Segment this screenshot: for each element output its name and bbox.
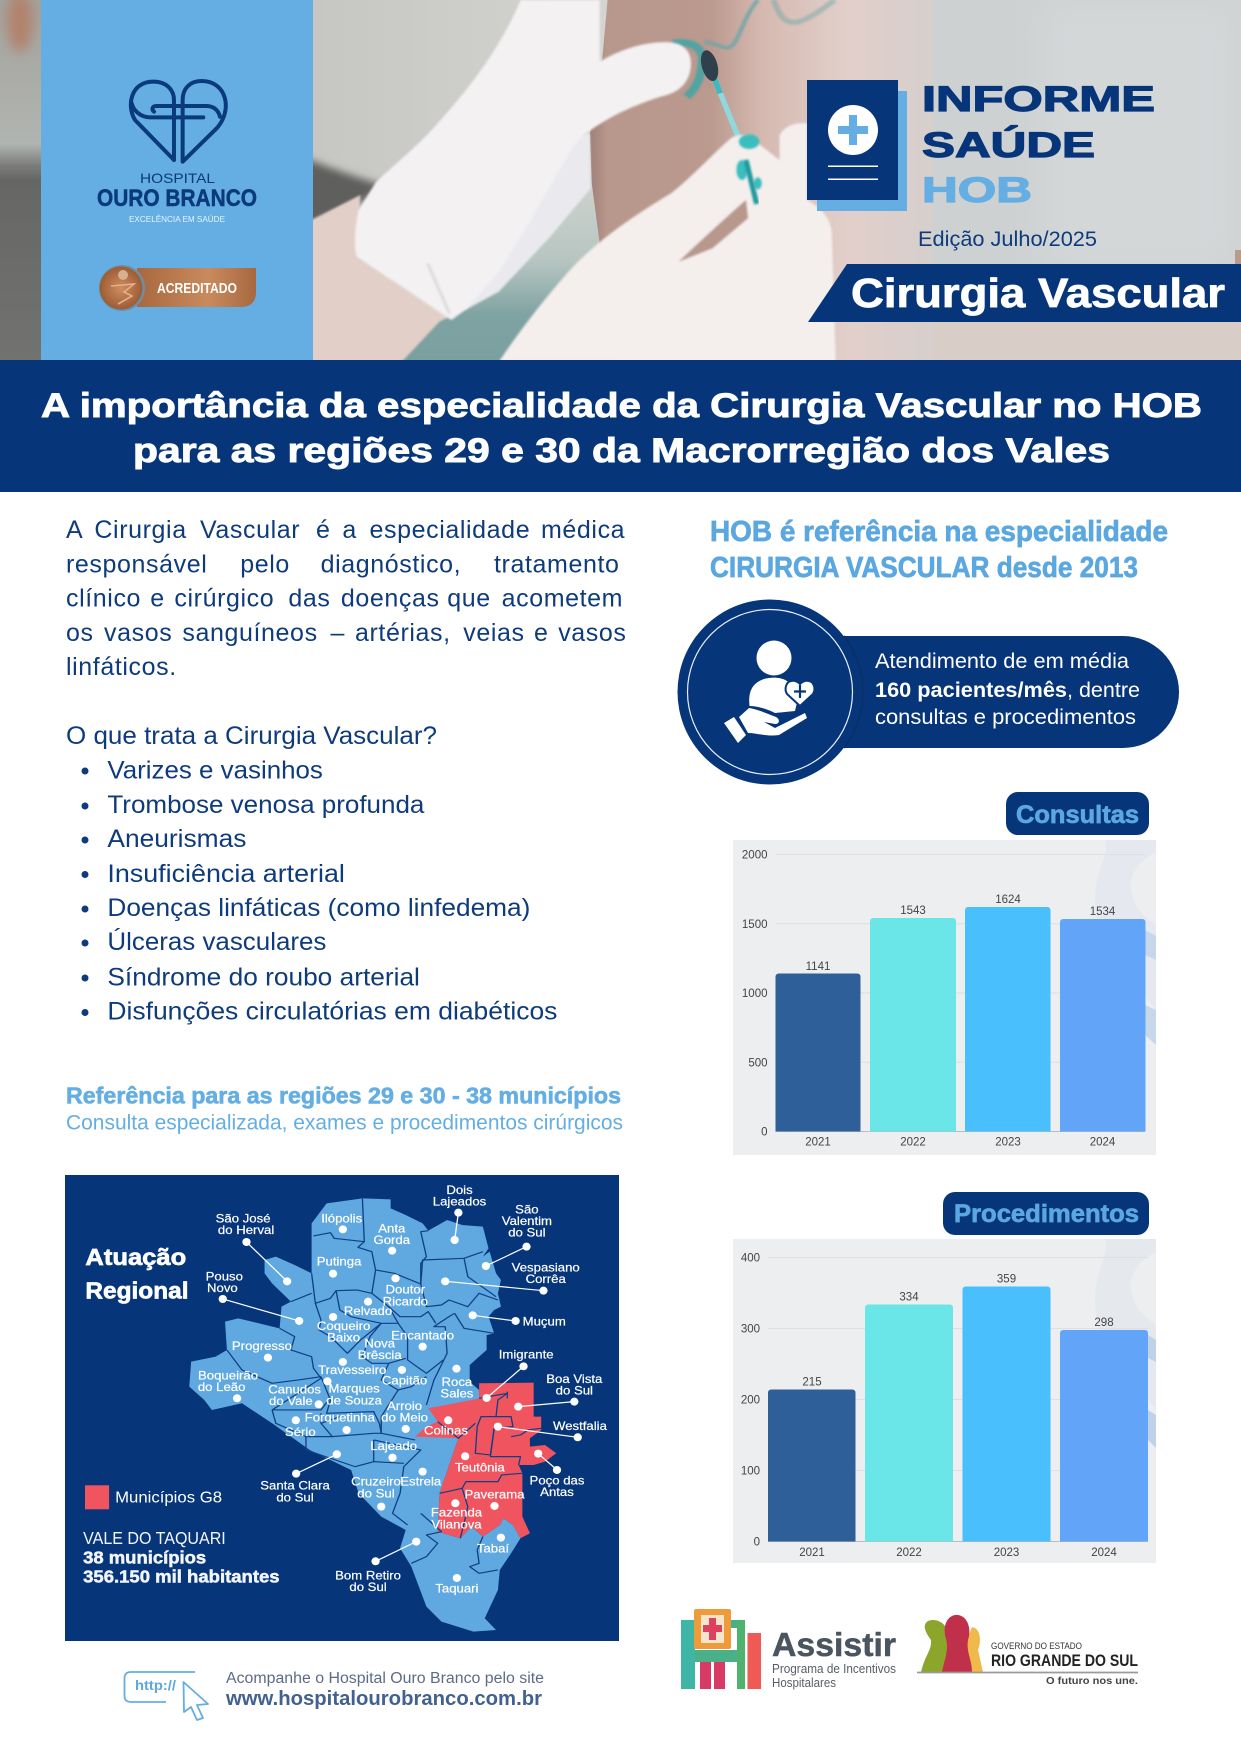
website text: www.hospitalourobranco.com.br [225, 1688, 542, 1710]
list of conditions: Aneurismas [107, 825, 246, 853]
map: municipality labels: Ilópolis [321, 1212, 362, 1225]
map: municipality labels: Bom Retiro [335, 1569, 401, 1582]
map: connector lines [223, 1213, 578, 1561]
map: municipality labels: Lajeados [433, 1195, 486, 1208]
callout: patients per month [678, 600, 1179, 784]
axis and value labels: 2023 [995, 1136, 1021, 1148]
text block: definition: clínico [66, 584, 141, 612]
title: informe saude hob: HOB [922, 171, 1032, 210]
map: municipality labels: Cruzeiro [351, 1475, 401, 1488]
map: municipality labels: Travesseiro [318, 1364, 386, 1377]
list of conditions: Doenças linfáticas (como linfedema) [107, 894, 530, 922]
bar chart: procedimentos [733, 1239, 1156, 1563]
title: informe saude hob: INFORME [922, 80, 1155, 119]
callout text: consultas e procedimentos [875, 706, 1136, 729]
map: municipality labels: Sério [285, 1426, 316, 1439]
map: municipality labels: Pouso [206, 1270, 243, 1283]
skin between glove fingers [679, 200, 748, 262]
badge: acreditado: ACREDITADO [157, 280, 237, 297]
map: location dots [219, 1209, 582, 1582]
logo: assistir [681, 1609, 896, 1690]
map: municipality labels: Corrêa [526, 1273, 566, 1286]
list of conditions: Trombose venosa profunda [107, 791, 424, 819]
axis and value labels: 1500 [742, 919, 768, 931]
title: informe saude hob [922, 80, 1155, 210]
map statistics: VALE DO TAQUARI [83, 1528, 226, 1548]
text block: definition: linfáticos. [66, 653, 177, 681]
text block: reference: Referência para as regiões 29 e 30 - 38 municípios [66, 1082, 621, 1108]
pill heading: consultas: Consultas [1016, 801, 1139, 829]
heading: reference since 2013 [710, 516, 1168, 584]
bars [768, 1286, 1148, 1542]
heading: reference since 2013: CIRURGIA VASCULAR desde 2013 [710, 552, 1138, 584]
icon: informe document [807, 80, 907, 211]
text block: definition: que [447, 584, 491, 612]
axis and value labels: 359 [997, 1274, 1016, 1286]
panel: hospital logo column [41, 0, 313, 360]
legend: Municípios G8 [115, 1489, 222, 1506]
axis and value labels: 334 [899, 1292, 919, 1304]
logo: assistir: Assistir [772, 1626, 896, 1663]
map: municipality labels: Arroio [387, 1400, 422, 1413]
axis and value labels: 2023 [994, 1547, 1019, 1559]
hospital name: OURO BRANCO [97, 185, 257, 212]
axis and value labels: 0 [761, 1126, 768, 1138]
forearm [305, 195, 449, 362]
map: municipality labels: Muçum [523, 1315, 566, 1328]
map: municipality labels: Lajeado [370, 1440, 417, 1453]
text block: definition: tratamento [494, 550, 620, 578]
logo: governo do estado rio grande do sul: RIO GRANDE DO SUL [991, 1651, 1138, 1670]
text block: definition: vasos [558, 619, 627, 647]
axis and value labels: 2000 [742, 850, 768, 862]
map statistics: 356.150 mil habitantes [83, 1567, 280, 1586]
axis and value labels: 200 [741, 1394, 760, 1406]
text block: definition: artérias, [355, 619, 451, 647]
text block: definition: Vascular [200, 516, 300, 544]
map: municipality labels: Westfalia [553, 1420, 607, 1433]
axis and value labels: 1543 [900, 905, 926, 917]
main heading: para as regiões 29 e 30 da Macrorregião dos Vales [133, 432, 1110, 470]
map: municipality labels: do Meio [381, 1411, 428, 1424]
axis and value labels: 100 [741, 1466, 760, 1478]
callout text: Atendimento de em média [875, 650, 1129, 673]
axis and value labels: 2022 [900, 1136, 926, 1148]
main heading: A importância da especialidade da Cirurgia Vascular no HOB [41, 387, 1202, 425]
logo: governo do estado rio grande do sul: O futuro nos une. [1046, 1675, 1138, 1687]
text block: definition: é [316, 516, 331, 544]
map: municipality labels: Paverama [465, 1488, 525, 1501]
teal mark around fingertip [673, 43, 702, 97]
axis and value labels: 300 [741, 1324, 760, 1336]
text block: definition: A [66, 516, 83, 544]
text block: definition: e [150, 584, 165, 612]
map: municipalities in light blue [189, 1198, 520, 1632]
main heading [41, 387, 1202, 470]
map: municipality labels: Vilanova [431, 1518, 482, 1531]
map: municipality labels: Dois [446, 1184, 473, 1197]
map: municipality labels: Coqueiro [317, 1320, 370, 1333]
map: municipality labels: Marques [329, 1382, 380, 1395]
axis and value labels: 500 [748, 1058, 768, 1070]
map: municipality labels: do Sul [276, 1491, 314, 1504]
map: municipality labels: Progresso [232, 1340, 292, 1353]
map: municipality labels: Ricardo [383, 1295, 428, 1308]
text block: definition: sanguíneos [182, 619, 318, 647]
text block: definition: médica [541, 516, 625, 544]
map: municipality labels: Canudos [268, 1383, 321, 1396]
map: municipality labels: do Herval [218, 1224, 274, 1237]
map heading: Regional [85, 1278, 189, 1304]
first glove [355, 0, 691, 320]
icon: hand holding person with heart [724, 640, 814, 743]
map: municipality labels: Novo [207, 1282, 238, 1295]
text block: reference [66, 1082, 623, 1134]
back of first glove [464, 132, 592, 311]
axis and value labels: 1624 [995, 894, 1021, 906]
icon: http cursor [124, 1672, 208, 1720]
text block: reference: Consulta especializada, exames e procedimentos cirúrgicos [66, 1112, 623, 1134]
map: municipality labels: São [515, 1203, 539, 1216]
heading: reference since 2013: HOB é referência na especialidade [710, 516, 1168, 548]
map: municipality labels: Sales [440, 1387, 473, 1400]
vein marking [704, 0, 758, 48]
axis and value labels [741, 1252, 1117, 1559]
map: municipality labels: Doutor [386, 1283, 425, 1296]
map: municipality labels [198, 1184, 607, 1595]
map statistics: 38 municípios [83, 1547, 206, 1567]
map: municipality labels: Tabaí [477, 1542, 510, 1555]
axis and value labels: 400 [741, 1252, 760, 1264]
axis and value labels: 0 [754, 1536, 760, 1548]
ribbon: cirurgia vascular [808, 264, 1241, 322]
hospital name: HOSPITAL [140, 170, 215, 186]
map: municipality labels: Capitão [382, 1374, 427, 1387]
list of conditions: Síndrome do roubo arterial [107, 964, 420, 992]
map: municipality labels: Boqueirão [198, 1369, 258, 1382]
map: municipality labels: Brêscia [358, 1349, 402, 1362]
text block: definition: responsável [66, 550, 207, 578]
text block: definition: especialidade [370, 516, 530, 544]
axis and value labels: 215 [802, 1376, 822, 1388]
text block: definition: das [288, 584, 331, 612]
map: municipality labels: Teutônia [455, 1461, 505, 1474]
text block: definition: a [342, 516, 357, 544]
map: municipality labels: do Vale [269, 1395, 313, 1408]
bars [776, 907, 1146, 1132]
logo: governo do estado rio grande do sul [917, 1615, 1138, 1687]
map: municipality labels: do Sul [508, 1226, 546, 1239]
website text: Acompanhe o Hospital Ouro Branco pelo site [226, 1670, 544, 1687]
icon: hospital heart logo [131, 81, 226, 162]
axis and value labels: 298 [1094, 1317, 1114, 1329]
map: municipality labels: do Sul [357, 1487, 395, 1500]
axis and value labels: 2024 [1090, 1136, 1116, 1148]
logo: assistir: Hospitalares [772, 1676, 836, 1690]
map statistics [83, 1528, 280, 1586]
axis and value labels: 2021 [799, 1547, 825, 1559]
map: municipality labels: Nova [364, 1337, 395, 1350]
panel: title banner [0, 360, 1241, 492]
hospital name [97, 170, 257, 224]
legend [85, 1485, 222, 1509]
text block: what it treats: O que trata a Cirurgia Vascular? [66, 722, 437, 750]
map: municipality labels: Relvado [344, 1305, 392, 1318]
text block: definition: – [330, 619, 345, 647]
map: municipality labels: Baixo [327, 1331, 360, 1344]
panel: regional map [65, 1175, 619, 1641]
text block: definition: doenças [341, 584, 440, 612]
title: informe saude hob: SAÚDE [922, 125, 1095, 165]
axis and value labels: 1000 [742, 988, 768, 1000]
pill heading: procedimentos: Procedimentos [954, 1200, 1139, 1228]
map: municipality labels: Roca [442, 1376, 472, 1389]
badge: acreditado [99, 265, 256, 311]
bar chart: consultas [733, 840, 1156, 1155]
text block: definition: Cirurgia [94, 516, 187, 544]
text block: definition: diagnóstico, [321, 550, 461, 578]
list of conditions [82, 756, 557, 1026]
callout text [875, 650, 1140, 729]
map: municipality labels: Poço das [530, 1474, 584, 1487]
ribbon: cirurgia vascular: Cirurgia Vascular [851, 270, 1225, 316]
text block: definition: os [66, 619, 94, 647]
dark shadow [313, 156, 378, 220]
second glove [499, 123, 836, 362]
map: municipality labels: Colinas [424, 1424, 468, 1437]
map: municipality labels: Gorda [373, 1234, 410, 1247]
map: municipality labels: do Leão [198, 1381, 246, 1394]
map: municipality labels: Valentim [502, 1215, 552, 1228]
website text [225, 1670, 544, 1710]
map: municipality labels: do Sul [349, 1581, 387, 1594]
map: municipality labels: Imigrante [499, 1348, 554, 1361]
header photo: gloved hands marking a vein on an arm [0, 0, 1241, 362]
text block: definition: pelo [240, 550, 290, 578]
callout text: , dentre [1067, 679, 1140, 702]
text block: definition: vasos [104, 619, 172, 647]
logo: governo do estado rio grande do sul: GOVERNO DO ESTADO [991, 1641, 1082, 1651]
map: municipality labels: Putinga [317, 1255, 361, 1268]
axis and value labels: 2022 [896, 1547, 922, 1559]
map: municipality labels: Santa Clara [260, 1479, 330, 1492]
map: municipality labels: Taquari [435, 1582, 478, 1595]
text block: definition: cirúrgico [174, 584, 274, 612]
map: G8 municipalities in red [415, 1383, 556, 1538]
text block: definition: veias [463, 619, 525, 647]
map: municipality labels: Vespasiano [512, 1261, 580, 1274]
map: municipality labels: Estrela [400, 1475, 441, 1488]
axis and value labels: 2021 [805, 1136, 831, 1148]
teal stain on second glove [736, 134, 762, 189]
map: municipality labels: Fazenda [431, 1506, 482, 1519]
edition text: Edição Julho/2025 [918, 228, 1097, 251]
map heading [85, 1244, 189, 1304]
icon: http cursor: http:// [135, 1678, 176, 1693]
text block: definition: acometem [502, 584, 623, 612]
map: municipality labels: Encantado [391, 1329, 454, 1342]
swab [714, 78, 738, 137]
list of conditions: Úlceras vasculares [107, 927, 326, 956]
list of conditions: Insuficiência arterial [107, 860, 345, 888]
map: municipality labels: do Sul [556, 1384, 593, 1397]
hospital name: EXCELÊNCIA EM SAÚDE [129, 215, 225, 224]
map: municipality labels: Boa Vista [546, 1373, 602, 1386]
list of conditions: Varizes e vasinhos [107, 756, 323, 784]
text block: definition: e [534, 619, 549, 647]
list of conditions: Disfunções circulatórias em diabéticos [107, 998, 557, 1026]
arm skin [590, 0, 933, 360]
axis and value labels: 1141 [806, 961, 830, 973]
text block: what it treats [66, 722, 557, 1026]
map: municipality labels: Forquetinha [305, 1411, 375, 1424]
background wall [313, 0, 352, 170]
axis and value labels: 2024 [1091, 1547, 1117, 1559]
axis and value labels [742, 850, 1116, 1148]
map: municipality labels: Antas [540, 1486, 574, 1499]
text block: definition [66, 516, 627, 681]
map: municipality labels: São José [216, 1212, 271, 1225]
pill heading: procedimentos [943, 1192, 1149, 1235]
map: municipality labels: Anta [378, 1222, 405, 1235]
map heading: Atuação [85, 1244, 186, 1271]
axis and value labels: 1534 [1090, 906, 1116, 918]
callout text: 160 pacientes/mês [875, 679, 1067, 702]
pill heading: consultas [1006, 792, 1149, 835]
logo: assistir: Programa de Incentivos [772, 1662, 896, 1676]
map: municipality labels: de Souza [326, 1394, 382, 1407]
